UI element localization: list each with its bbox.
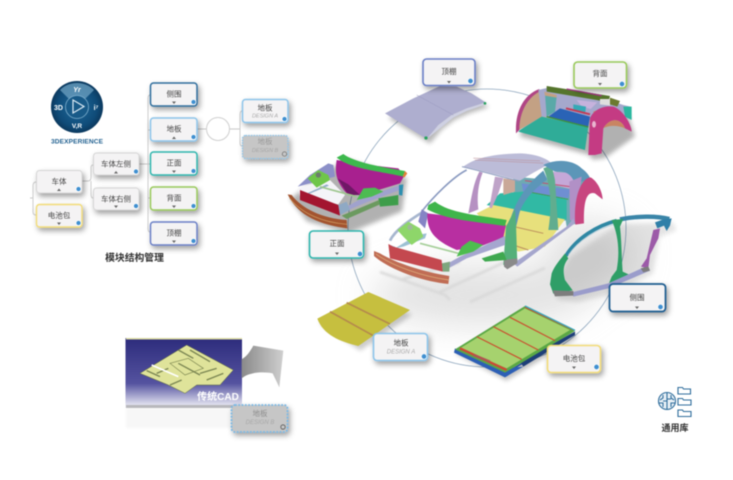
tree node: 正面: 正面 — [166, 158, 182, 168]
tree node: 地板 DESIGN A: DESIGN A — [252, 114, 278, 120]
tree node: 车体左侧: 车体左侧 — [101, 158, 131, 168]
label: 地板 DESIGN B: DESIGN B — [246, 420, 274, 426]
logo: 3DEXPERIENCE compass: 3DEXPERIENCE — [51, 138, 104, 146]
label: 地板 DESIGN B — [232, 405, 288, 432]
tree node: 地板 DESIGN A — [242, 100, 288, 122]
tree connectors — [30, 95, 242, 232]
label: 地板 DESIGN A — [374, 334, 428, 360]
tree node: 地板 DESIGN B — [242, 136, 288, 158]
label: 侧围 — [610, 284, 666, 312]
tree node: 地板 DESIGN B: DESIGN B — [252, 148, 278, 154]
label: 通用库: 通用库 — [661, 422, 689, 433]
tree node: 车体左侧 — [94, 153, 139, 175]
tree node: 车体 — [36, 170, 82, 193]
logo: 3DEXPERIENCE compass: i⁷ — [94, 105, 99, 112]
tree node: 地板 DESIGN B: 地板 — [258, 136, 273, 146]
label: 顶棚: 顶棚 — [442, 66, 456, 76]
tree node: 背面: 背面 — [166, 192, 182, 202]
label: 电池包: 电池包 — [563, 353, 586, 363]
orbit ring — [348, 89, 626, 367]
front end of car — [374, 170, 507, 284]
tree node: 电池包 — [36, 204, 82, 227]
tree node: 地板 — [150, 118, 197, 141]
arrow: CAD to design B — [242, 346, 283, 387]
label: 地板 DESIGN B: 地板 — [252, 408, 268, 418]
icon: brain and folders — [658, 388, 691, 416]
tree node: 侧围 — [150, 83, 197, 106]
tree node: 侧围: 侧围 — [166, 88, 182, 98]
label: 背面 — [574, 62, 626, 88]
tree node: 正面 — [150, 152, 197, 175]
part: complete car body — [374, 153, 603, 284]
car interior and floor — [477, 163, 590, 252]
logo: 3DEXPERIENCE compass — [51, 81, 104, 146]
variant selector circle — [206, 118, 230, 140]
part: side panel — [550, 217, 676, 302]
label: 地板 DESIGN A: DESIGN A — [387, 350, 415, 356]
heading: module structure management: 模块结构管理 — [105, 251, 164, 264]
logo: 3DEXPERIENCE compass: V,R — [72, 123, 82, 130]
label: 侧围: 侧围 — [630, 292, 644, 302]
tree node: 电池包: 电池包 — [48, 210, 71, 220]
caption: 传统CAD: 传统CAD — [197, 390, 239, 403]
label: 地板 DESIGN A: 地板 — [394, 338, 409, 348]
logo: 3DEXPERIENCE compass: Yr — [73, 87, 82, 94]
tree node: 车体: 车体 — [52, 176, 67, 186]
logo: 3DEXPERIENCE compass: 3D — [54, 105, 63, 112]
legacy CAD screenshot — [126, 338, 242, 428]
ground shadow under car — [370, 220, 635, 325]
part: rear assembly — [516, 86, 635, 160]
label: 背面: 背面 — [592, 68, 608, 78]
tree node: 地板 DESIGN A: 地板 — [258, 102, 273, 112]
part: battery pack — [454, 306, 576, 381]
label: 正面 — [310, 231, 364, 258]
tree node: 顶棚 — [150, 222, 197, 245]
tree node: 车体右侧: 车体右侧 — [101, 194, 131, 204]
tree node: 背面 — [150, 187, 197, 210]
part: floor panel — [317, 292, 412, 351]
cabin roof and pillars — [462, 153, 558, 230]
tree node: 车体右侧 — [94, 188, 139, 210]
part: front assembly — [288, 154, 407, 233]
tree node: 地板: 地板 — [166, 124, 182, 134]
label: 顶棚 — [423, 59, 475, 86]
lower body and rear wheel arch — [503, 161, 603, 269]
tree node: 顶棚: 顶棚 — [166, 228, 182, 238]
part: roof — [385, 86, 489, 144]
label: 电池包 — [548, 346, 600, 372]
label: 正面: 正面 — [330, 239, 345, 248]
